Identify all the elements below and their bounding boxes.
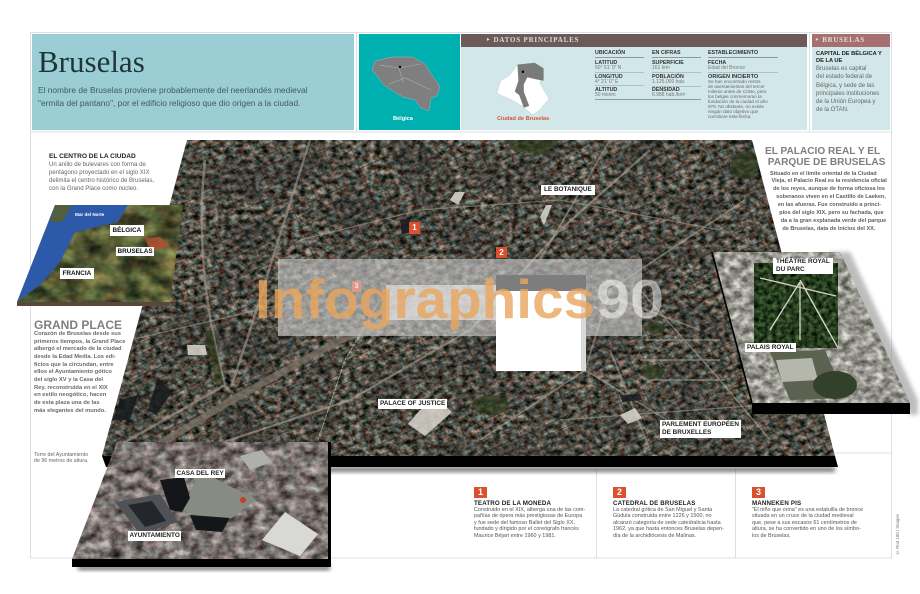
text block: el centro de la ciudad — [49, 153, 154, 192]
text: torre del ayuntamiento: Torre del Ayuntamiento — [34, 452, 88, 458]
heading: EL CENTRO DE LA CIUDAD — [49, 153, 136, 160]
body: ellos el Ayuntamiento gótico — [34, 369, 112, 375]
body: los de Bruselas. — [752, 533, 791, 539]
map marker 2 — [496, 247, 507, 258]
text: del estado federal de — [816, 74, 872, 80]
body: Situado en el límite oriental de la Ciudad — [770, 170, 877, 176]
column: establecimiento: corrobore esta fecha. — [708, 114, 751, 119]
body: Construido en el XIX, alberga una de las com- — [474, 507, 585, 513]
body: Un anillo de bulevares con forma de — [49, 162, 146, 168]
icon: city of Brussels map — [496, 62, 549, 116]
column: establecimiento: ESTABLECIMIENTO — [708, 50, 758, 56]
column: establecimiento: FECHA — [708, 60, 726, 66]
main aerial map — [100, 140, 840, 472]
column: en cifras: 1.125.000 hab. — [652, 79, 685, 85]
text: torre del ayuntamiento — [34, 452, 88, 464]
column: ubicación: 50 msnm — [595, 92, 616, 98]
text block: palacio real — [765, 146, 887, 232]
body: con la Grand Place como núcleo. — [49, 186, 138, 192]
callout 1: Teatro de la Moneda — [474, 487, 585, 539]
body: Rey, reconstruida en el XIX — [34, 385, 108, 391]
body: fundado y dirigido por el coreógrafo francés — [474, 526, 579, 532]
subheading — [816, 50, 882, 64]
body: pentágono proyectado en el siglo XIX — [49, 170, 150, 176]
column: en cifras: 6.988 hab./km² — [652, 92, 685, 98]
body: da a la gran explanada verde del parque — [781, 218, 886, 224]
inset map: Grand Place — [70, 442, 331, 570]
column: ubicación — [595, 49, 701, 100]
map marker 2: 2 — [499, 248, 504, 257]
label: Bruselas: BRUSELAS — [118, 248, 153, 254]
body: que, pese a sus escasos 61 centímetros de — [752, 520, 857, 526]
body: situada en un cruce de la ciudad medieval — [752, 513, 854, 519]
map marker 3 — [352, 281, 361, 292]
label: Palace of Justice — [378, 399, 447, 409]
label: Parlement Européen — [660, 420, 741, 438]
body — [752, 507, 863, 539]
blank white block in map — [386, 275, 586, 371]
body: delimita el centro histórico de Bruselas, — [49, 178, 154, 184]
label: Parlement Européen: PARLEMENT EUROPÉEN — [662, 421, 739, 428]
label: Le Botanique — [541, 185, 595, 195]
body: más elegantes del mundo. — [34, 408, 106, 414]
column: ubicación: ALTITUD — [595, 87, 617, 93]
body: La catedral gótica de San Miguel y Santa — [613, 507, 712, 513]
intro text: "ermita del pantano", por el edificio religioso que dio origen a la ciudad. — [38, 98, 300, 108]
text block: grand place — [34, 318, 126, 414]
body: en estilo neogótico, hacen — [34, 392, 106, 398]
number — [613, 487, 626, 498]
label: Ayuntamiento — [128, 531, 181, 541]
body: de Bruselas, data de inicios del XX. — [782, 226, 875, 232]
label: Théâtre Royal: THÉÂTRE ROYAL — [776, 258, 830, 265]
label: Francia — [60, 268, 94, 279]
body: pañías de ópera más prestigiosas de Europa — [474, 513, 582, 519]
column: ubicación: UBICACIÓN — [595, 50, 625, 56]
body: de esta plaza una de las — [34, 400, 100, 406]
body: 1962, ya que hasta entonces Bruselas depen- — [613, 526, 724, 532]
title: MANNEKEN PIS — [752, 500, 801, 507]
text: Bélgica, y sede de las — [816, 82, 874, 88]
label: Bélgica: Bélgica — [393, 116, 413, 122]
number — [474, 487, 487, 498]
body — [474, 507, 585, 539]
label: Théâtre Royal — [773, 258, 833, 274]
map marker 1 — [409, 222, 420, 234]
body — [613, 507, 724, 539]
heading: PARQUE DE BRUSELAS — [768, 157, 885, 168]
text: de la OTAN. — [816, 107, 849, 113]
column: ubicación: LATITUD — [595, 60, 617, 66]
column: ubicación: 50° 51′ 0″ N — [595, 65, 621, 71]
body: día de la archidiócesis de Malinas. — [613, 533, 696, 539]
heading: Bruselas — [38, 44, 145, 79]
body: desde la Edad Media. Los edi- — [34, 354, 116, 360]
text — [816, 66, 880, 113]
number: 1 — [478, 487, 483, 497]
intro text: El nombre de Bruselas proviene probablemente del neerlandés medieval — [38, 85, 307, 95]
header bar: ‣ BRUSELAS — [815, 36, 865, 44]
body: albergó el mercado de la ciudad — [34, 346, 122, 352]
heading: GRAND PLACE — [34, 318, 122, 332]
label: Bélgica — [110, 225, 144, 236]
label: Palace of Justice: PALACE OF JUSTICE — [380, 400, 445, 407]
text: de la Unión Europea y — [816, 99, 875, 105]
column: establecimiento — [708, 50, 778, 119]
body: primeros tiempos, la Grand Place — [34, 339, 125, 345]
text: torre del ayuntamiento: de 96 metros de altura. — [34, 458, 88, 464]
column: en cifras: POBLACIÓN — [652, 74, 684, 80]
callout 3: Manneken Pis — [752, 487, 863, 539]
column: en cifras: SUPERFICIE — [652, 60, 684, 66]
column: en cifras: 161 km² — [652, 65, 670, 71]
body: ficios que la circundan, entre — [34, 362, 114, 368]
column: ubicación: LONGITUD — [595, 74, 623, 80]
label: Théâtre Royal: DU PARC — [776, 266, 805, 273]
body: pios del siglo XIX, pero su fachada, que — [779, 210, 884, 216]
header bar — [461, 34, 807, 47]
body: Vieja, el Palacio Real es la residencia oficial — [772, 178, 887, 184]
column: en cifras — [652, 50, 701, 98]
column: establecimiento: Se han encontrado restos — [708, 79, 761, 84]
subheading: CAPITAL DE BÉLGICA Y — [816, 51, 882, 57]
body: en las afueras. Fue construido a princi- — [778, 202, 881, 208]
column: en cifras: DENSIDAD — [652, 87, 680, 93]
body: alcanzó categoría de sede catedralicia hasta — [613, 520, 721, 526]
icon: Belgium map — [372, 56, 440, 112]
column: establecimiento: de asentamientos del tercer — [708, 84, 765, 89]
label: Palais Royal: PALAIS ROYAL — [747, 344, 794, 350]
watermark panel over map — [278, 259, 642, 336]
body: "El niño que orina" es una estatuilla de bronce — [752, 507, 863, 513]
heading: EL PALACIO REAL Y EL — [765, 146, 880, 157]
number: 2 — [617, 487, 622, 497]
watermark text: Infographics — [255, 268, 595, 330]
column: establecimiento: 979. No obstante, no existe — [708, 104, 764, 109]
label: Casa del Rey: CASA DEL REY — [176, 470, 224, 476]
body: Corazón de Bruselas desde sus — [34, 331, 121, 337]
column: establecimiento: los belgas conmemoran la — [708, 94, 762, 99]
label: Le Botanique: LE BOTANIQUE — [544, 186, 592, 193]
panel: Belgium locator — [359, 34, 460, 130]
body — [770, 170, 887, 232]
body: y fue sede del famoso Ballet del Siglo XX, — [474, 520, 575, 526]
body: de los reyes, aunque de forma oficiosa los — [773, 186, 885, 192]
title: CATEDRAL DE BRUSELAS — [613, 500, 696, 507]
label: Francia: FRANCIA — [62, 270, 91, 276]
column: establecimiento: fundación de la ciudad el año — [708, 99, 768, 104]
label: Bélgica: BÉLGICA — [112, 226, 141, 234]
heading — [765, 146, 885, 168]
panel: Bruselas capital — [812, 34, 890, 130]
body: del siglo XV y la Casa del — [34, 377, 103, 383]
column: ubicación: 4° 21′ 0″ E — [595, 79, 618, 85]
body — [34, 331, 126, 414]
callout 2: Catedral de Bruselas — [613, 487, 724, 539]
image credit: © Rod 180 / Images — [895, 514, 900, 555]
column: establecimiento: ningún dato objetivo que — [708, 109, 758, 114]
inset map: Bélgica — [15, 205, 185, 306]
map marker 3: 3 — [355, 283, 358, 290]
number: 3 — [756, 487, 761, 497]
panel: title — [32, 34, 354, 130]
number — [752, 487, 765, 498]
body: altura, se ha convertido en uno de los símbo- — [752, 526, 861, 532]
column: en cifras: EN CIFRAS — [652, 50, 681, 56]
column: establecimiento: ORIGEN INCIERTO — [708, 74, 758, 80]
map marker 1: 1 — [412, 223, 417, 232]
text: Bruselas es capital — [816, 66, 866, 72]
label: Ayuntamiento: AYUNTAMIENTO — [130, 532, 180, 539]
label: Ciudad de Bruselas: Ciudad de Bruselas — [497, 116, 549, 122]
inset map: Palais Royal and park — [710, 252, 918, 415]
body — [49, 162, 154, 192]
column: establecimiento: Edad del Bronce — [708, 65, 745, 71]
column: establecimiento: milenio antes de Cristo, pero — [708, 89, 766, 94]
subheading: DE LA UE — [816, 58, 842, 64]
header bar — [812, 34, 890, 47]
body: soberanos viven en el Castillo de Laeken, — [776, 194, 886, 200]
header bar: ‣ DATOS PRINCIPALES — [486, 36, 579, 44]
watermark text: 90 — [596, 268, 664, 330]
text: Mar del Norte: Mar del Norte — [75, 212, 105, 217]
body: Gúdula construida entre 1226 y 1500, no — [613, 513, 712, 519]
title: TEATRO DE LA MONEDA — [474, 500, 551, 507]
panel: datos principales — [461, 34, 807, 130]
body: Maurice Béjart entre 1960 y 1981. — [474, 533, 556, 539]
label: Parlement Européen: DE BRUXELLES — [662, 429, 711, 436]
text: principales instituciones — [816, 91, 879, 97]
intro text — [38, 85, 307, 108]
